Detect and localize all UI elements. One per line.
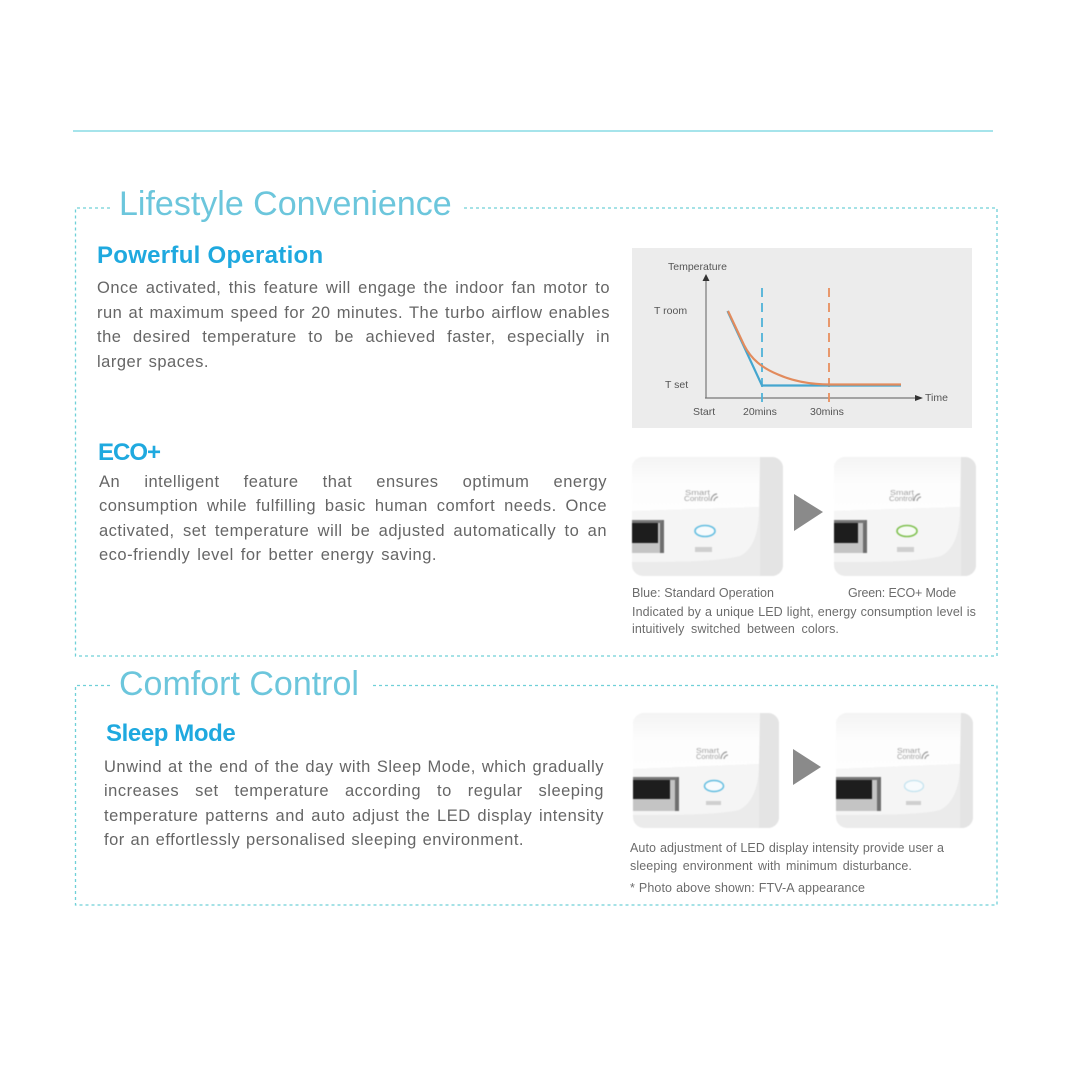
title: Comfort Control: Comfort Control bbox=[119, 665, 359, 703]
photo: unit with dimmed LED bbox=[835, 712, 974, 828]
text block: Powerful Operation description: the desired temperature to be achieved faster, especially in bbox=[97, 328, 610, 346]
photo: unit with dimmed LED: Control bbox=[897, 754, 921, 761]
text block: Powerful Operation description: Once activated, this feature will engage the indoor fan motor to bbox=[97, 279, 610, 297]
text block: LED intensity caption: sleeping environment with minimum disturbance. bbox=[630, 859, 912, 873]
photo: unit with dimmed LED: Smart bbox=[897, 748, 920, 755]
footnote: photo appearance: * Photo above shown: FTV-A appearance bbox=[630, 881, 865, 895]
x axis bbox=[705, 395, 923, 401]
caption: Blue Standard Operation: Blue: Standard Operation bbox=[632, 586, 774, 600]
photo: unit with green LED bbox=[833, 456, 976, 576]
photo: unit with blue LED: Smart bbox=[685, 490, 710, 497]
chart labels: 20mins bbox=[743, 406, 777, 418]
text block: ECO+ description bbox=[99, 473, 607, 564]
chart labels bbox=[654, 261, 948, 418]
30 minute marker bbox=[828, 288, 830, 404]
text block: ECO+ description: eco-friendly level for better energy saving. bbox=[99, 546, 437, 564]
text block: LED caption: Indicated by a unique LED light, energy consumption level is bbox=[632, 605, 976, 619]
text block: LED intensity caption: Auto adjustment of LED display intensity provide user a bbox=[630, 841, 944, 855]
arrow: bright to dim bbox=[793, 749, 821, 785]
caption: Green ECO+ Mode: Green: ECO+ Mode bbox=[848, 586, 956, 600]
photo: unit with bright LED: Control bbox=[696, 754, 720, 761]
text block: Sleep Mode description: for an effortlessly personalised sleeping environment. bbox=[104, 831, 524, 849]
orange curve bbox=[728, 311, 901, 384]
text block: Sleep Mode description: Unwind at the end of the day with Sleep Mode, which gradually bbox=[104, 758, 604, 776]
text block: ECO+ description: activated, set temperature will be adjusted automatically to an bbox=[99, 522, 607, 540]
arrow: blue to green bbox=[794, 494, 823, 531]
y axis bbox=[702, 274, 710, 398]
text block: LED caption bbox=[632, 605, 976, 636]
title: Lifestyle Convenience: Lifestyle Convenience bbox=[119, 185, 452, 223]
photo: unit with green LED: Smart bbox=[890, 490, 914, 497]
heading: Powerful Operation: Powerful Operation bbox=[97, 242, 323, 269]
blue curve bbox=[728, 311, 901, 386]
chart: temperature over time bbox=[632, 248, 972, 428]
20 minute marker bbox=[761, 288, 763, 404]
text block: ECO+ description: An intelligent feature that ensures optimum energy bbox=[99, 473, 607, 491]
text block: Powerful Operation description: larger spaces. bbox=[97, 353, 209, 371]
chart labels: T set bbox=[665, 379, 688, 391]
text block: ECO+ description: consumption while fulfilling basic human comfort needs. Once bbox=[99, 497, 607, 515]
heading: ECO+: ECO+ bbox=[98, 439, 160, 466]
photo: unit with blue LED: Control bbox=[684, 496, 710, 503]
chart labels: Time bbox=[925, 392, 948, 404]
text block: Sleep Mode description: temperature patterns and auto adjust the LED display intensity bbox=[104, 807, 604, 825]
panel: Comfort Control frame bbox=[74, 684, 998, 906]
photo: unit with green LED: Control bbox=[889, 496, 914, 503]
text block: Sleep Mode description bbox=[104, 758, 604, 849]
photo: unit with bright LED: Smart bbox=[696, 748, 719, 755]
panel: Lifestyle Convenience frame bbox=[74, 207, 998, 657]
photo: unit with blue LED bbox=[631, 456, 784, 576]
text block: Sleep Mode description: increases set temperature according to regular sleeping bbox=[104, 782, 604, 800]
text block: Powerful Operation description: run at maximum speed for 20 minutes. The turbo airflow enables bbox=[97, 304, 610, 322]
text block: Powerful Operation description bbox=[97, 279, 610, 371]
chart labels: 30mins bbox=[810, 406, 844, 418]
photo: unit with bright LED bbox=[632, 712, 780, 828]
chart labels: Temperature bbox=[668, 261, 727, 273]
chart labels: T room bbox=[654, 305, 687, 317]
chart labels: Start bbox=[693, 406, 715, 418]
text block: LED caption: intuitively switched between colors. bbox=[632, 622, 839, 636]
heading: Sleep Mode: Sleep Mode bbox=[106, 720, 235, 747]
text block: LED intensity caption bbox=[630, 841, 944, 873]
